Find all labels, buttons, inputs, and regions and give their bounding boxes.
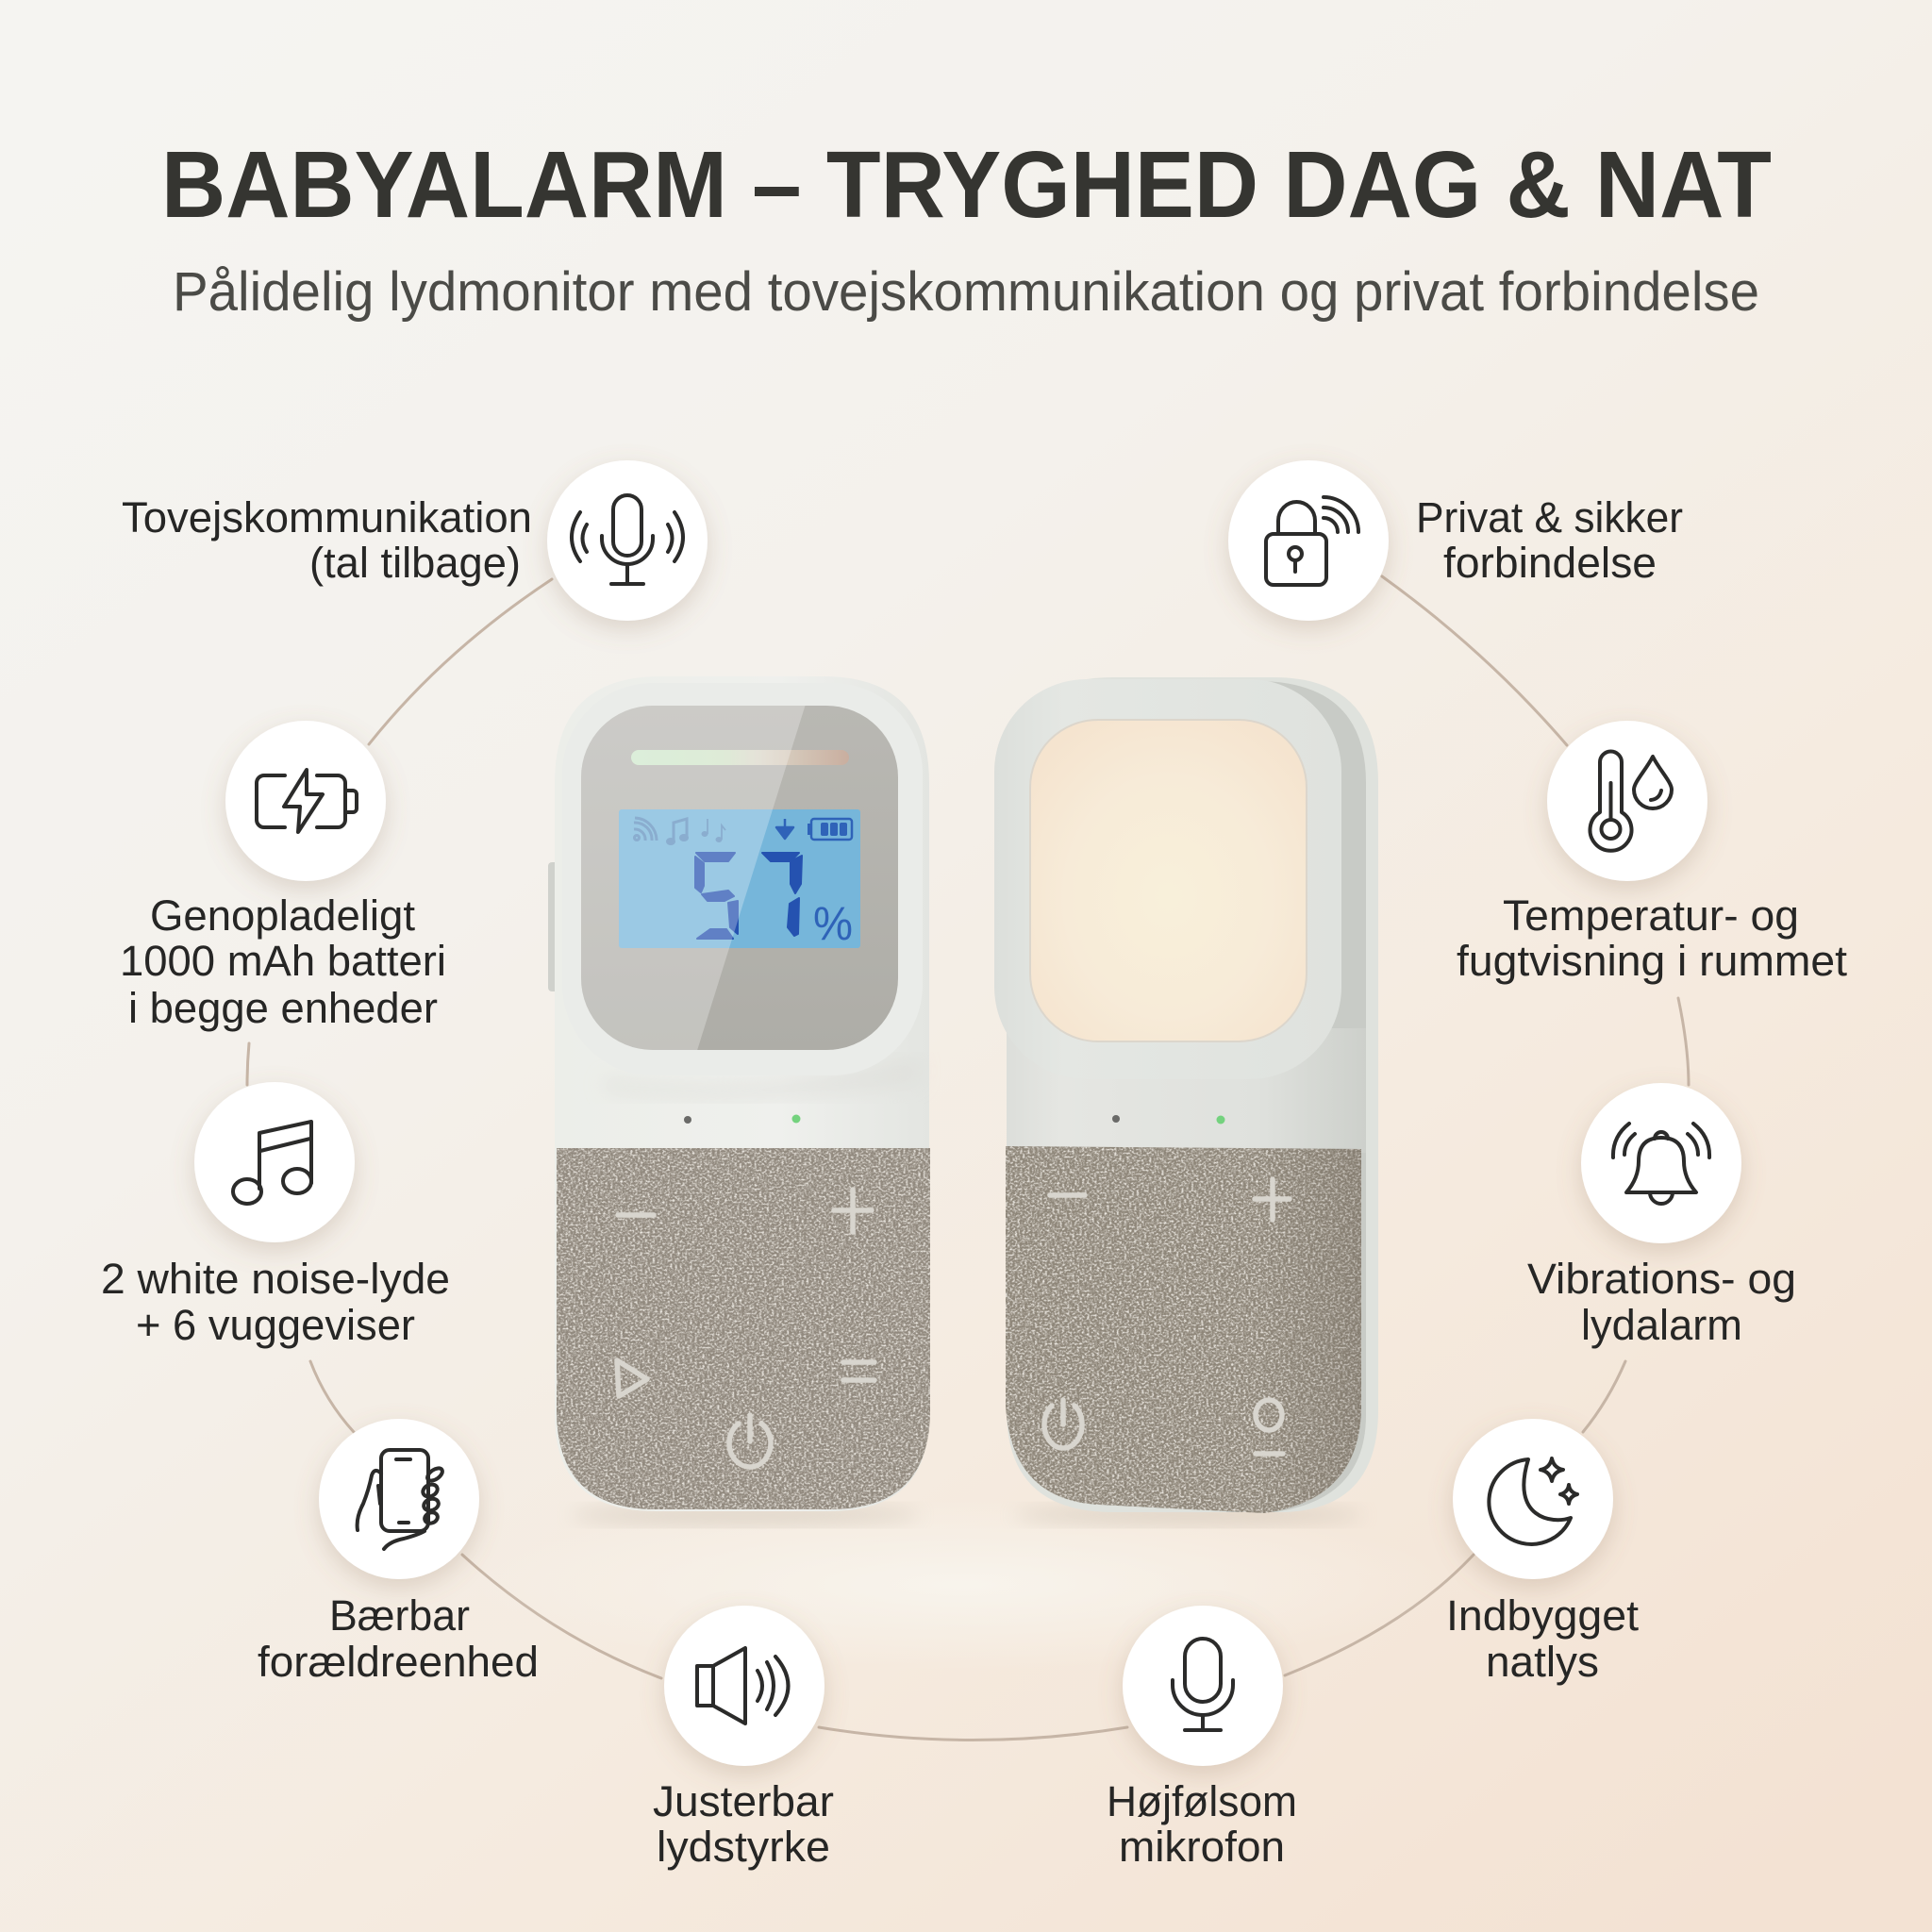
feature: portable parent unit [258, 1419, 539, 1686]
icon: microphone [1173, 1639, 1233, 1730]
feature: white noise and lullabies [101, 1082, 450, 1349]
label [653, 1777, 834, 1871]
label: Bærbar [329, 1591, 470, 1640]
feature: private and secure connection [1228, 460, 1683, 621]
head bezel [562, 683, 923, 1075]
icon badge [1453, 1419, 1613, 1579]
fabric speaker panel [557, 1148, 930, 1509]
icon badge [194, 1082, 355, 1242]
label: Højfølsom [1107, 1777, 1297, 1825]
icon: charging battery [257, 770, 357, 832]
label: fugtvisning i rummet [1457, 937, 1848, 985]
screen [581, 706, 898, 1050]
icon badge [1581, 1083, 1741, 1243]
feature: two-way talk [122, 460, 708, 621]
device: baby unit with night light [994, 677, 1378, 1513]
button: plus [834, 1190, 872, 1232]
label: forældreenhed [258, 1638, 539, 1686]
label: 2 white noise-lyde [101, 1255, 450, 1303]
label: lydalarm [1581, 1301, 1742, 1349]
icon: music notes [233, 1122, 311, 1204]
side button [548, 862, 559, 991]
label: i begge enheder [128, 984, 438, 1032]
LCD battery icon [808, 819, 852, 840]
button: power [1044, 1400, 1082, 1448]
device: parent unit with LCD display [548, 676, 930, 1511]
label: natlys [1486, 1638, 1599, 1686]
label [120, 891, 446, 1032]
shadow under head [604, 1057, 920, 1099]
icon badge [1547, 721, 1707, 881]
icon: thermometer and drop [1591, 751, 1672, 851]
label [1416, 493, 1683, 587]
label [1107, 1777, 1297, 1871]
connecting ring of arcs [247, 576, 1689, 1740]
night light panel [1030, 720, 1307, 1041]
label [122, 493, 532, 587]
icon badge [664, 1606, 824, 1766]
icon: speaker [697, 1648, 789, 1724]
subtitle: Pålidelig lydmonitor med tovejskommunikation og privat forbindelse [173, 261, 1759, 323]
icon: hand holding phone [358, 1450, 444, 1549]
title: BABYALARM – TRYGHED DAG & NAT [161, 132, 1772, 238]
button: light [1256, 1400, 1283, 1454]
side shadow band [1226, 681, 1366, 1512]
label: lydstyrke [657, 1823, 830, 1871]
feature: built-in night light [1446, 1419, 1640, 1686]
icon: moon and stars [1489, 1458, 1577, 1544]
body shell [555, 676, 929, 1511]
button: minus [1050, 1192, 1085, 1198]
head bezel [994, 679, 1341, 1079]
label: Genopladeligt [150, 891, 415, 940]
button: plus [1255, 1179, 1290, 1220]
label: Vibrations- og [1527, 1255, 1796, 1303]
icon: ringing bell [1613, 1124, 1709, 1204]
icon badge [225, 721, 386, 881]
label: (tal tilbage) [309, 539, 521, 587]
fabric speaker panel [1006, 1146, 1361, 1513]
feature: rechargeable battery [120, 721, 446, 1032]
icon: padlock with wireless [1266, 497, 1358, 585]
label: Indbygget [1446, 1591, 1640, 1640]
label: mikrofon [1119, 1823, 1285, 1871]
feature: sensitive microphone [1107, 1606, 1297, 1871]
LCD music notes [666, 819, 725, 845]
icon badge [1123, 1606, 1283, 1766]
feature: temperature and humidity [1457, 721, 1848, 985]
LCD digits 57 [695, 853, 802, 939]
button: play [617, 1360, 647, 1396]
label: Justerbar [653, 1777, 834, 1825]
label [101, 1255, 450, 1349]
LCD percent sign: % [813, 897, 853, 950]
icon badge [1228, 460, 1389, 621]
front body [1007, 1028, 1366, 1153]
indicator lights [1112, 1115, 1224, 1124]
LCD arrow icon [776, 819, 793, 839]
floor glow and device shadow [472, 1500, 1453, 1670]
label: 1000 mAh batteri [120, 937, 446, 985]
indicator lights [684, 1115, 800, 1124]
outer shell [1007, 677, 1378, 1512]
label: Privat & sikker [1416, 493, 1683, 541]
label [1446, 1591, 1640, 1686]
label [258, 1591, 539, 1686]
button: minus [618, 1212, 654, 1218]
label: + 6 vuggeviser [136, 1301, 415, 1349]
button: menu [843, 1362, 874, 1380]
label: forbindelse [1443, 539, 1657, 587]
label: Temperatur- og [1503, 891, 1799, 940]
label [1527, 1255, 1796, 1349]
icon badge [319, 1419, 479, 1579]
screen glare [581, 706, 806, 1050]
LED sound bar [631, 750, 849, 765]
icon: microphone with sound waves [572, 495, 683, 584]
LCD wifi icon [634, 818, 657, 841]
feature: vibration and sound alarm [1527, 1083, 1796, 1349]
label: Tovejskommunikation [122, 493, 532, 541]
LCD display [619, 809, 860, 950]
button: power [729, 1415, 771, 1467]
label [1457, 891, 1848, 985]
feature: adjustable volume [653, 1606, 834, 1871]
icon badge [547, 460, 708, 621]
